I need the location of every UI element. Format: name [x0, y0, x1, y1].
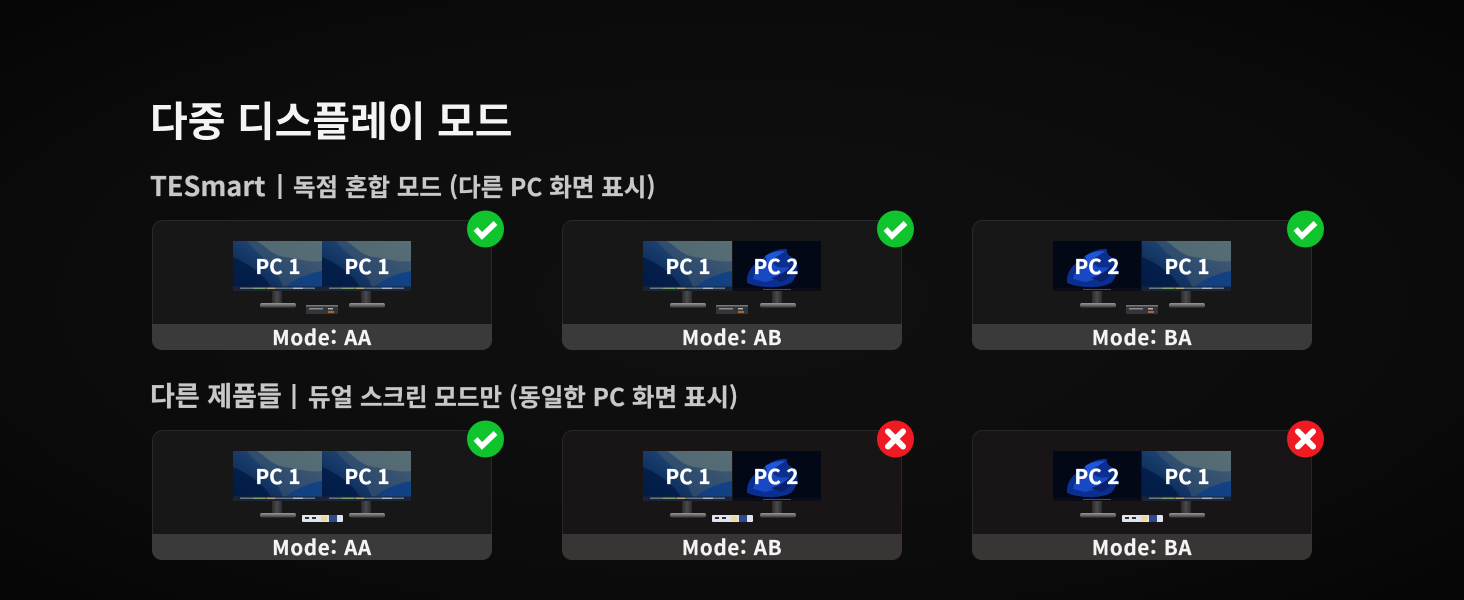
- monitors: PC 1 and PC 1: PC 1: [256, 250, 300, 280]
- icon: white switch: [1122, 515, 1163, 522]
- icon: KVM switch: [1126, 305, 1158, 314]
- icon: check: [1287, 210, 1324, 248]
- icon: check: [467, 420, 504, 458]
- mode label: Mode: AA: [272, 321, 372, 351]
- mode label: Mode: BA: [1092, 531, 1192, 561]
- heading: TESmart exclusive mixed mode: TESmart: [150, 165, 265, 204]
- monitors: PC 1 and PC 1: PC 1: [345, 460, 389, 490]
- monitors: PC 2 and PC 1: [1053, 241, 1231, 308]
- monitors: PC 2 and PC 1: PC 1: [1165, 460, 1209, 490]
- icon: white switch: [302, 515, 343, 522]
- monitors: PC 2 and PC 1: [1053, 451, 1231, 518]
- monitors: PC 2 and PC 1: PC 2: [1075, 460, 1119, 490]
- monitors: PC 1 and PC 1: [233, 451, 411, 518]
- monitors: PC 1 and PC 2: PC 2: [754, 460, 798, 490]
- icon: KVM switch: [306, 305, 338, 314]
- monitors: PC 2 and PC 1: PC 2: [1075, 250, 1119, 280]
- icon: check: [467, 210, 504, 248]
- icon: white switch: [712, 515, 753, 522]
- heading: TESmart exclusive mixed mode: [150, 165, 656, 204]
- monitors: PC 1 and PC 2: [643, 451, 821, 518]
- monitors: PC 1 and PC 2: [643, 241, 821, 308]
- monitors: PC 2 and PC 1: PC 1: [1165, 250, 1209, 280]
- monitors: PC 1 and PC 2: PC 1: [666, 460, 710, 490]
- panel: TESmart mode BA: [972, 210, 1324, 351]
- icon: cross: [877, 420, 914, 458]
- panel: TESmart mode AB: [562, 210, 914, 351]
- heading: other products dual screen only: 다른 제품들: [150, 375, 282, 414]
- monitors: PC 1 and PC 1: PC 1: [345, 250, 389, 280]
- mode label: Mode: AA: [272, 531, 372, 561]
- icon: cross: [1287, 420, 1324, 458]
- icon: KVM switch: [716, 305, 748, 314]
- heading: other products dual screen only: 듀얼 스크린 모드만 (동일한 PC 화면 표시): [308, 379, 738, 414]
- heading: other products dual screen only: [150, 375, 738, 414]
- panel: other products mode AB: [562, 420, 914, 561]
- panel: other products mode BA: [972, 420, 1324, 561]
- monitors: PC 1 and PC 2: PC 1: [666, 250, 710, 280]
- mode label: Mode: AB: [682, 321, 782, 351]
- monitors: PC 1 and PC 1: PC 1: [256, 460, 300, 490]
- panel: TESmart mode AA: [152, 210, 504, 351]
- heading: TESmart exclusive mixed mode: 독점 혼합 모드 (다른 PC 화면 표시): [293, 169, 656, 204]
- mode label: Mode: AB: [682, 531, 782, 561]
- panel: other products mode AA: [152, 420, 504, 561]
- monitors: PC 1 and PC 2: PC 2: [754, 250, 798, 280]
- title: 다중 디스플레이 모드: [150, 88, 512, 148]
- mode label: Mode: BA: [1092, 321, 1192, 351]
- icon: check: [877, 210, 914, 248]
- monitors: PC 1 and PC 1: [233, 241, 411, 308]
